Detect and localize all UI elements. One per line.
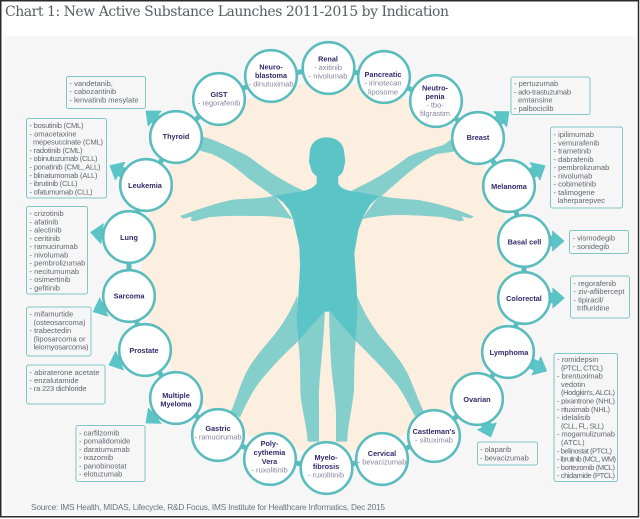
node: Pancreatic: Pancreatic [365, 70, 401, 79]
callout: leukemia drugs: - radotinib (CML) [30, 146, 83, 155]
node: Polycythemia Vera [244, 433, 296, 485]
callout: breast drugs: emtansine [518, 96, 553, 105]
node: Neutropenia [410, 75, 462, 127]
callout: sarcoma drugs [26, 307, 91, 356]
callout: lymphoma drugs: - romidepsin [557, 355, 598, 364]
node: Prostate: Prostate [129, 346, 159, 355]
callout: colorectal drugs: - tipiracil/ [574, 295, 604, 304]
node: Myelofibrosis: - ruxolitinib [308, 470, 344, 480]
callout: lymphoma drugs: (PTCL, CTCL) [561, 363, 604, 372]
node: Multiple Myeloma [150, 372, 202, 424]
callout: leukemia drugs: - ibrutinib (CLL) [30, 179, 78, 188]
arrows [89, 103, 564, 440]
horizontal arms [180, 195, 474, 221]
callout: leukemia drugs [26, 118, 106, 198]
callout: prostate drugs: - ra 223 dichloride [30, 384, 86, 393]
node: Gastric: - ramucirumab [194, 433, 242, 442]
callout: colorectal drugs: - regorafenib [574, 279, 616, 288]
callout: myeloma drugs: - daratumumab [79, 445, 130, 454]
callout: melanoma drugs: - cobimetinib [554, 180, 596, 188]
callout: melanoma drugs: - talimogene [554, 188, 595, 197]
node: Lymphoma [482, 326, 534, 378]
callout: leukemia drugs: mepesuccinate (CML) [33, 138, 104, 147]
callout: leukemia drugs: - ponatinib (CML, ALL) [30, 162, 101, 172]
callout: breast drugs [511, 77, 590, 114]
callout: breast drugs: - pertuzumab [514, 79, 558, 88]
node: Renal: Renal [318, 54, 338, 64]
node: Leukemia: Leukemia [128, 181, 163, 190]
callout: lung drugs: - gefitinib [30, 283, 60, 292]
node: GIST: - regorafenib [198, 98, 240, 108]
callout: lymphoma drugs: - pixantrone (NHL) [557, 396, 616, 406]
callout: sarcoma drugs: leiomyosarcoma) [34, 343, 89, 352]
node: Ovarian [451, 373, 503, 425]
peach background circle [142, 82, 512, 452]
callout: lymphoma drugs: vedotin [561, 380, 585, 389]
callout: myeloma drugs [76, 426, 145, 482]
callout: myeloma drugs: - pomalidomide [79, 437, 130, 446]
callout: lymphoma drugs: - rituximab (NHL) [557, 405, 610, 414]
callout: lung drugs: - alectinib [30, 226, 62, 234]
callout: thyroid drugs: - cabozantinib [70, 87, 116, 96]
callout: melanoma drugs [550, 127, 622, 208]
node: Breast: Breast [467, 133, 490, 142]
callout: lymphoma drugs [554, 354, 618, 482]
node: Polycythemia Vera: Poly- [261, 439, 279, 448]
callout: sarcoma drugs: - mifamurtide [30, 310, 73, 318]
callout: prostate drugs: - enzalutamide [30, 376, 79, 385]
callout: lymphoma drugs: - idelalisib [557, 413, 590, 422]
spread legs [231, 295, 424, 417]
callout: melanoma drugs: - vemurafenib [554, 138, 599, 147]
callout: lymphoma drugs: (ATCL) [561, 438, 585, 447]
node: Myelofibrosis [301, 442, 352, 494]
callout: leukemia drugs: - omacetaxine [30, 129, 77, 138]
node: Ovarian: Ovarian [463, 395, 491, 404]
callout: lung drugs: - afatinib [30, 217, 58, 226]
callout: melanoma drugs: - trametinib [554, 146, 591, 156]
node: Basal cell [498, 215, 550, 267]
callout: leukemia drugs: - ofatumumab (CLL) [30, 187, 93, 196]
callout: lymphoma drugs: - mogamulizumab [557, 430, 615, 439]
node: Pancreatic: liposome [368, 88, 398, 96]
callout: breast drugs: - palbociclib [514, 104, 554, 113]
callout: lung drugs: - nivolumab [30, 250, 68, 259]
callout: basal cell drugs: - vismodegib [572, 234, 615, 242]
callout: thyroid drugs [66, 76, 146, 108]
raised arms [200, 137, 454, 197]
callout: leukemia drugs: - bosutinib (CML) [30, 121, 84, 130]
node: Colorectal [498, 272, 550, 324]
node: Cervical [356, 433, 408, 485]
node: Cervical: - bevacizumab [358, 458, 406, 466]
callout: lung drugs: - ceritinib [30, 234, 60, 243]
straight legs [298, 311, 356, 442]
node: Neutropenia: - tbo- [426, 100, 444, 110]
node: Castleman's: - siltuximab [415, 436, 453, 445]
source note: Source: IMS Health, MIDAS, Lifecycle, R&D Focus, IMS Institute for Healthcare Informatics, Dec 2015 [31, 502, 385, 512]
node: Castleman's [408, 410, 460, 462]
node: Neutropenia: Neutro- [422, 84, 449, 92]
node: Myelofibrosis: Myelo- [314, 453, 338, 462]
node: Neutropenia: penia [425, 92, 445, 101]
callout: prostate drugs: - abiraterone acetate [30, 368, 100, 377]
node: Lymphoma: Lymphoma [490, 348, 529, 357]
node: Polycythemia Vera: cythemia [254, 448, 286, 457]
node: Castleman's: Castleman's [413, 427, 455, 436]
callout: lung drugs: - osimertinib [30, 275, 70, 284]
callout: lymphoma drugs: - chidamide (PTCL) [557, 471, 616, 480]
callout: myeloma drugs: - panobinostat [79, 461, 127, 470]
callout: lung drugs: - pembrolizumab [30, 258, 85, 268]
callout: melanoma drugs: - dabrafenib [554, 155, 594, 164]
callout: myeloma drugs: - carfilzomib [79, 428, 119, 438]
node: Neutropenia: filgrastim [420, 109, 450, 118]
node: Polycythemia Vera: Vera [262, 457, 278, 466]
callout: colorectal drugs: - ziv-aflibercept [574, 287, 625, 296]
node: Renal [303, 42, 354, 94]
callout: lung drugs: - ramucirumab [30, 242, 78, 251]
callout: ovarian drugs: - olaparib [480, 445, 511, 454]
node: Renal: - nivolumab [309, 72, 347, 80]
node: Neuroblastoma: - dinutuximab [248, 80, 294, 88]
callout: lymphoma drugs: - brentuximab [557, 372, 603, 381]
node: Pancreatic: - irinotecan [364, 79, 402, 88]
node: Melanoma [483, 160, 535, 212]
node: Thyroid [150, 111, 202, 163]
callout: lymphoma drugs: - ibrutinib (MCL, WM) [557, 455, 616, 464]
node: Prostate [119, 324, 171, 376]
callout: lymphoma drugs: - bortezomib (MCL) [557, 463, 616, 472]
callout: ovarian drugs: - bevacizumab [480, 453, 529, 462]
node: Multiple Myeloma: Multiple [162, 391, 190, 400]
node: Basal cell: Basal cell [508, 238, 541, 246]
human figure [180, 137, 474, 442]
node: Neuroblastoma [245, 50, 297, 102]
node: Breast [452, 112, 504, 164]
callout: sarcoma drugs: (liposarcoma or [34, 334, 86, 343]
callout: lymphoma drugs: - belinostat (PTCL) [557, 446, 612, 455]
callout: colorectal drugs [570, 276, 630, 318]
ring connectors [129, 68, 524, 468]
title: Chart 1: New Active Substance Launches 2011-2015 by Indication [5, 4, 449, 20]
callout: lymphoma drugs: (Hodgkin's, ALCL) [561, 388, 616, 397]
node: Renal: - axitinib [314, 63, 342, 72]
callout: colorectal drugs: trifluridine [577, 304, 610, 313]
callout: myeloma drugs: - ixazomib [79, 453, 113, 462]
callout: basal cell drugs: - sonidegib [572, 242, 609, 251]
callout: melanoma drugs: - pembrolizumab [554, 163, 609, 172]
node: GIST: GIST [210, 90, 228, 99]
node: Pancreatic [358, 51, 410, 103]
node: Neuroblastoma: Neuro- [259, 62, 283, 72]
node: Gastric [192, 409, 244, 461]
node: GIST [193, 73, 245, 125]
node: Sarcoma [103, 270, 155, 322]
callout: leukemia drugs: - blinatumomab (ALL) [30, 171, 98, 180]
callout: breast drugs: - ado-trastuzumab [514, 87, 571, 96]
node: Lung: Lung [120, 233, 138, 242]
node: Lung [103, 211, 155, 263]
callout: melanoma drugs: - ipilimumab [554, 130, 594, 139]
node: Sarcoma: Sarcoma [114, 292, 145, 300]
node: Neuroblastoma: blastoma [255, 71, 288, 80]
node: Multiple Myeloma: Myeloma [160, 400, 193, 408]
callout: leukemia drugs: - obinutuzumab (CLL) [30, 154, 98, 163]
callout: lung drugs: - crizotinib [30, 209, 64, 218]
callout: lung drugs [26, 206, 88, 294]
node: Leukemia [120, 159, 172, 211]
node: Gastric: Gastric [205, 424, 231, 433]
callout: basal cell drugs [570, 230, 628, 254]
torso and head [275, 137, 379, 341]
node: Melanoma: Melanoma [491, 182, 528, 191]
node: Colorectal: Colorectal [506, 294, 542, 303]
callout: prostate drugs [26, 365, 105, 404]
callout: lung drugs: - necitumumab [30, 267, 79, 276]
node: Cervical: Cervical [368, 449, 396, 458]
callout: sarcoma drugs: - trabectedin [30, 326, 71, 335]
callout: thyroid drugs: - vandetanib, [70, 79, 113, 88]
node: Thyroid: Thyroid [163, 132, 189, 141]
callout: melanoma drugs: - nivolumab [554, 171, 592, 180]
callout: sarcoma drugs: (osteosarcoma) [34, 318, 86, 327]
callout: thyroid drugs: - lenvatinib mesylate [70, 96, 138, 104]
callout: melanoma drugs: laherparepvec [558, 196, 605, 205]
node: Polycythemia Vera: - ruxolitinib [251, 466, 288, 474]
node: Myelofibrosis: fibrosis [313, 462, 339, 471]
callout: myeloma drugs: - elotuzumab [79, 470, 122, 478]
callout: ovarian drugs [478, 442, 538, 465]
callout: lymphoma drugs: (CLL, FL, SLL) [561, 421, 604, 430]
